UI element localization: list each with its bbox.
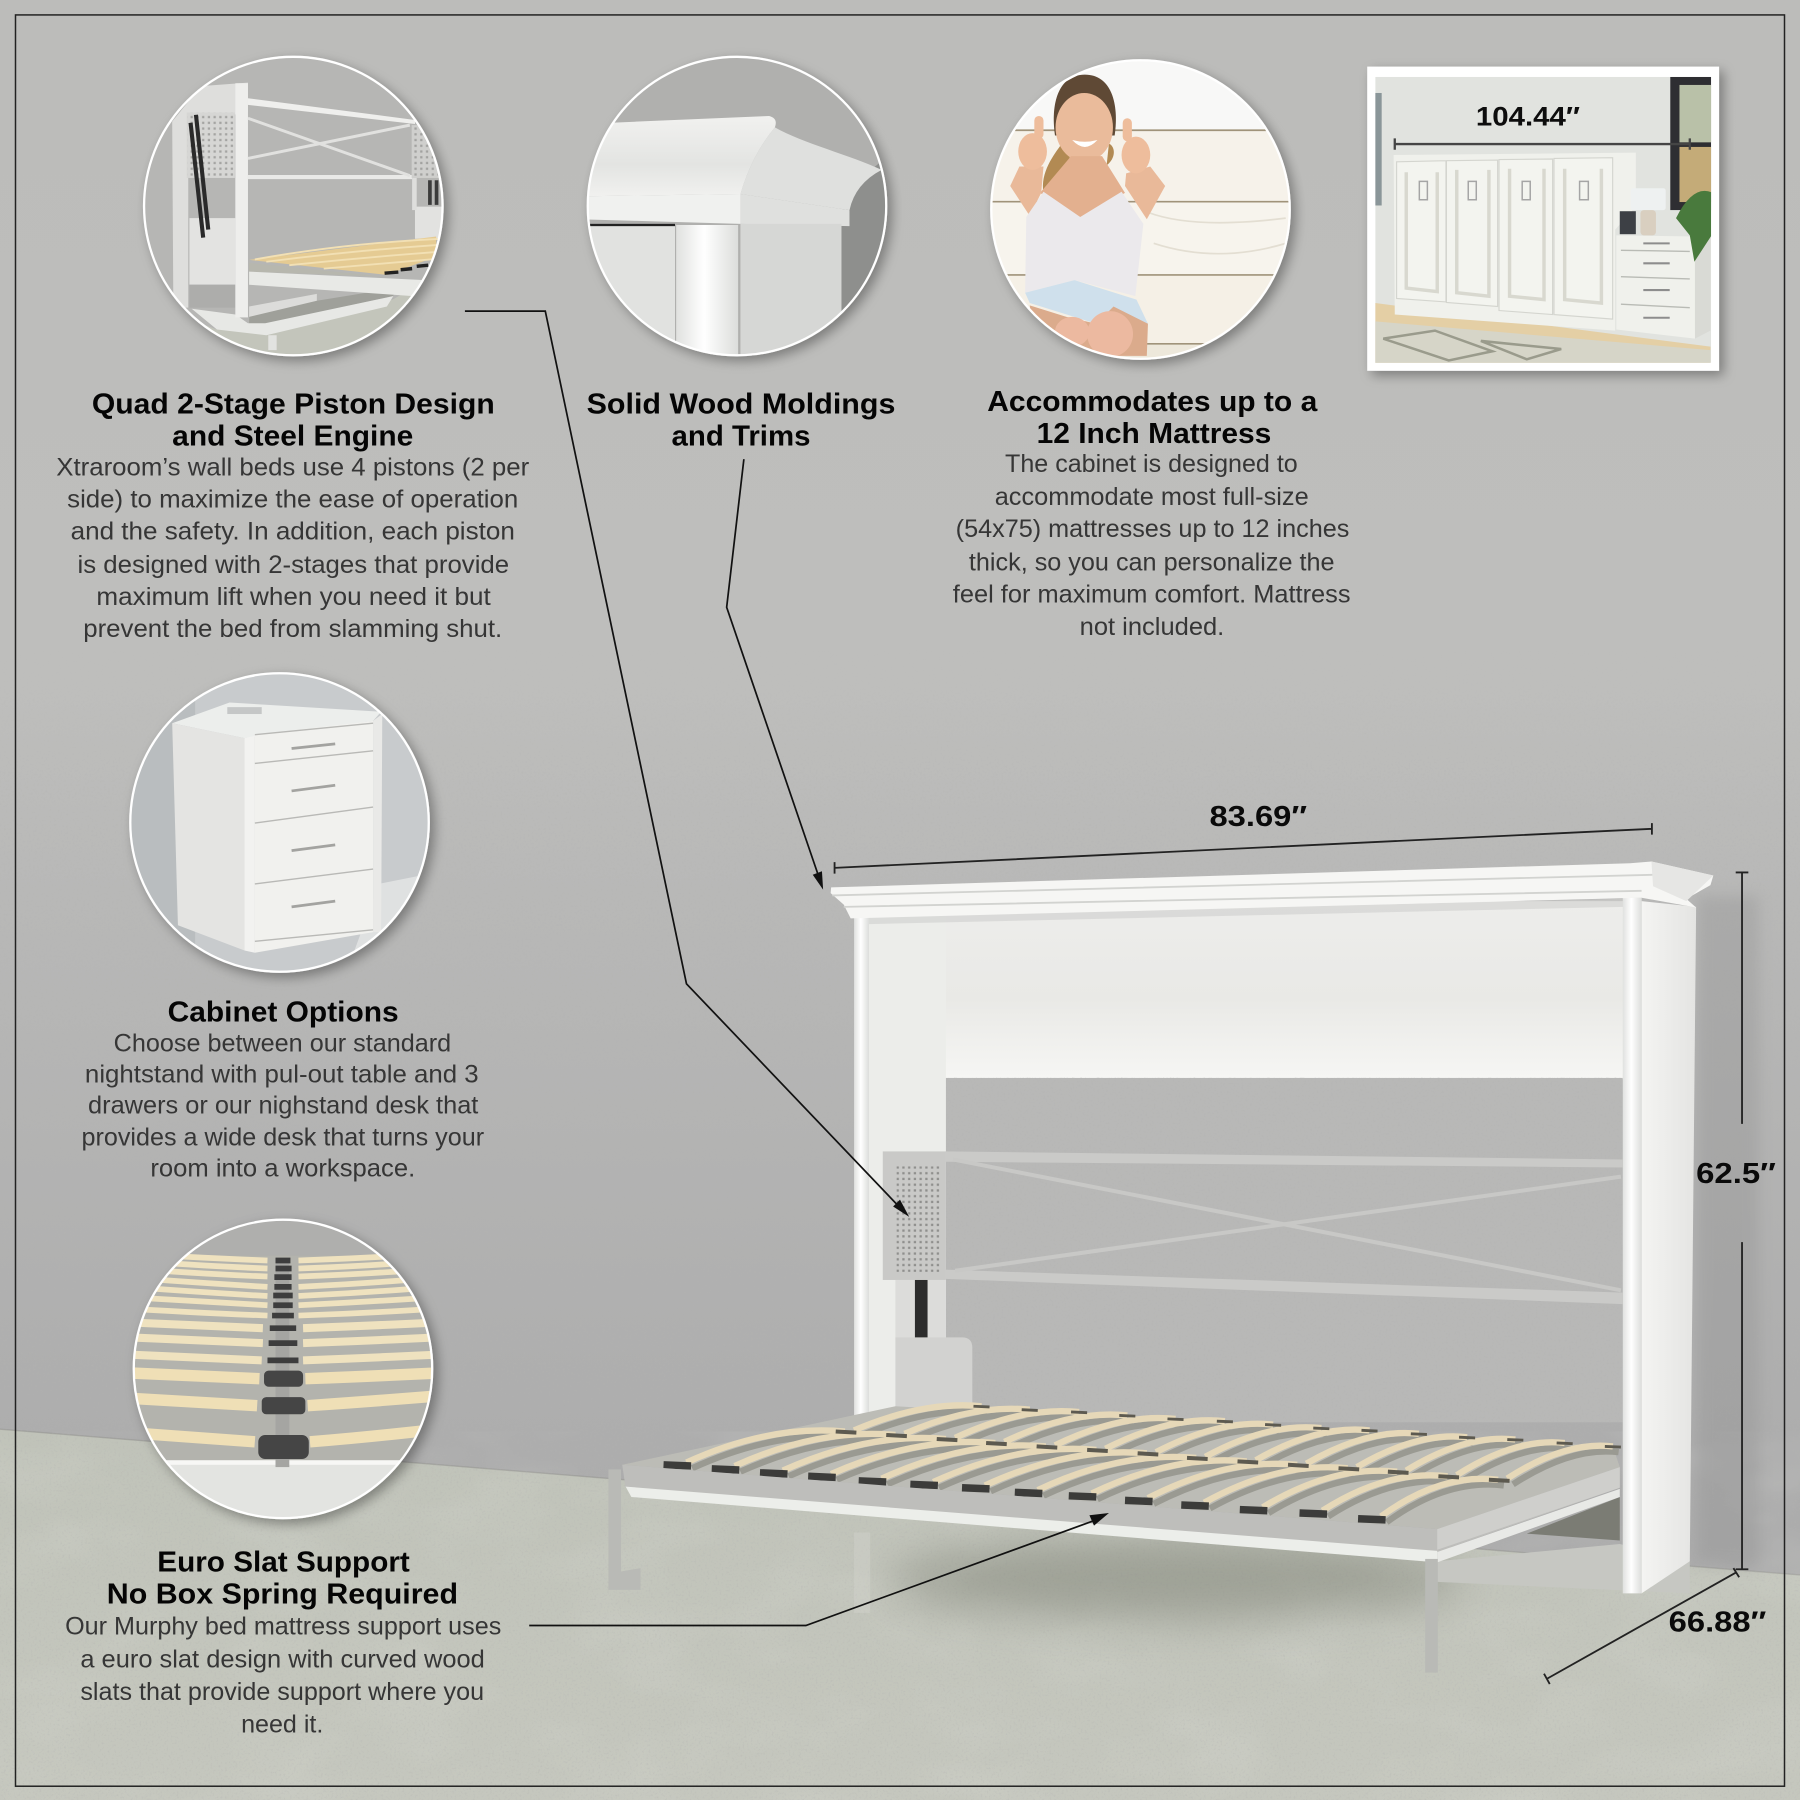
text: piston description: Xtraroom’s wall beds use 4 pistons (2 per — [56, 453, 529, 481]
text: piston description — [56, 453, 529, 643]
text: piston description: prevent the bed from slamming shut. — [83, 615, 502, 643]
text: cabinet description: nightstand with pul-out table and 3 — [85, 1061, 479, 1089]
heading: cabinet options: Cabinet Options — [168, 997, 399, 1029]
text: cabinet description — [82, 1030, 484, 1183]
heading: piston design: and Steel Engine — [172, 420, 413, 452]
text: cabinet description: provides a wide desk that turns your — [82, 1124, 484, 1152]
text: mattress description: (54x75) mattresses up to 12 inches — [956, 515, 1349, 543]
slat end caps — [664, 1406, 1621, 1520]
leader line: euro slats — [529, 1513, 1109, 1626]
text: euro slat description: slats that provide support where you — [80, 1678, 484, 1706]
dimension: depth 66.88: 66.88″ — [1669, 1606, 1767, 1638]
circle photo: woman on mattress — [987, 57, 1297, 367]
cabinet back panel — [869, 901, 1623, 1079]
heading: mattress: 12 Inch Mattress — [1037, 418, 1271, 450]
text: euro slat description: Our Murphy bed mattress support uses — [65, 1613, 501, 1641]
shelf bars — [945, 1151, 1623, 1304]
text: cabinet description: room into a workspace. — [150, 1155, 415, 1183]
bed platform — [622, 1406, 1620, 1529]
heading: piston design: Quad 2-Stage Piston Design — [92, 388, 495, 420]
heading: piston design — [92, 388, 495, 452]
text: euro slat description — [65, 1613, 501, 1738]
bed front rail — [622, 1465, 1620, 1562]
heading: moldings — [587, 388, 895, 452]
circle photo: crown molding — [580, 52, 895, 363]
text: mattress description: not included. — [1080, 613, 1224, 641]
heading: moldings: Solid Wood Moldings — [587, 388, 895, 420]
perforated side plate — [883, 1151, 946, 1280]
text: mattress description: The cabinet is designed to — [1005, 450, 1298, 478]
crown underside shadow — [869, 899, 1623, 924]
inset photo: wall bed room with 104.44 dimension — [1367, 67, 1719, 371]
lower side plate — [895, 1337, 972, 1410]
dimension: width 83.69: 83.69″ — [1209, 801, 1307, 833]
heading: mattress — [987, 386, 1318, 450]
heading: mattress: Accommodates up to a — [987, 386, 1318, 418]
text: piston description: maximum lift when you need it but — [96, 583, 491, 611]
heading: euro slat — [107, 1547, 458, 1611]
slat shadows and slats — [686, 1405, 1619, 1522]
piston — [895, 1280, 946, 1341]
dimension: width 83.69 — [835, 801, 1652, 874]
dimension: height 62.5: 62.5″ — [1696, 1158, 1776, 1190]
crown molding — [831, 862, 1713, 918]
text: piston description: and the safety. In addition, each piston — [71, 518, 515, 546]
circle photo: euro slats — [129, 1215, 439, 1524]
text: euro slat description: need it. — [241, 1710, 323, 1738]
dimension line 104.44 — [1395, 138, 1690, 150]
left pilaster — [854, 916, 869, 1423]
bed legs — [608, 1469, 1438, 1673]
cabinet plinth and reflection — [854, 1533, 1690, 1613]
text: cabinet description: Choose between our standard — [114, 1030, 451, 1058]
circle photo: nightstand — [126, 668, 436, 978]
dimension: height 62.5 — [1696, 872, 1776, 1569]
circle photo: piston mechanism — [138, 52, 448, 362]
right side panel — [1642, 901, 1696, 1593]
leader line: pistons — [465, 311, 909, 1217]
text: euro slat description: a euro slat design with curved wood — [80, 1645, 485, 1673]
text: mattress description: accommodate most full-size — [995, 483, 1309, 511]
text: piston description: side) to maximize the ease of operation — [67, 485, 518, 513]
text: piston description: is designed with 2-stages that provide — [77, 551, 509, 579]
text: mattress description: feel for maximum comfort. Mattress — [953, 581, 1351, 609]
left cabinet inner side — [869, 913, 946, 1423]
text: mattress description: thick, so you can personalize the — [969, 549, 1335, 577]
right pilaster — [1623, 898, 1642, 1593]
leader line: moldings — [727, 459, 823, 890]
heading: euro slat: No Box Spring Required — [107, 1579, 458, 1611]
heading: moldings: and Trims — [672, 420, 810, 452]
heading: euro slat: Euro Slat Support — [157, 1547, 410, 1579]
text: mattress description — [953, 450, 1351, 641]
text: cabinet description: drawers or our nighstand desk that — [88, 1092, 478, 1120]
recessed wall — [945, 1078, 1623, 1422]
dimension: depth 66.88 — [1544, 1568, 1767, 1684]
underside opening — [1527, 1497, 1620, 1541]
background: concrete floor — [0, 1429, 1800, 1800]
main product: wall bed — [608, 862, 1713, 1673]
label 104.44: 104.44″ — [1476, 102, 1580, 132]
